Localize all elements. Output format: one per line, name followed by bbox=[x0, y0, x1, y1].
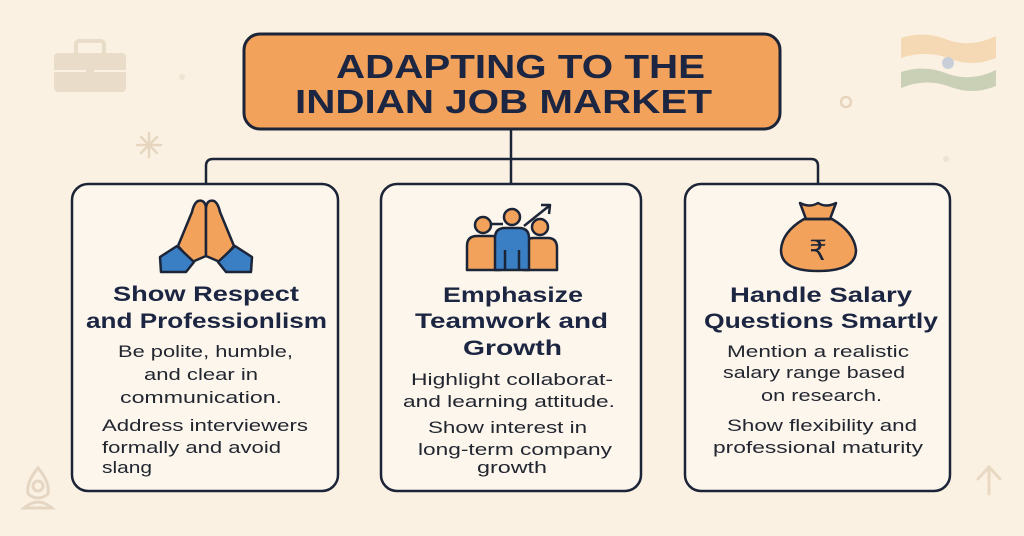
panel: salary: Show flexibility and bbox=[727, 416, 917, 435]
panel: respect: slang bbox=[102, 458, 152, 477]
panel: respect: Show Respect bbox=[113, 283, 299, 306]
panel: teamwork: Show interest in bbox=[428, 418, 587, 437]
panel: salary: Questions Smartly bbox=[704, 310, 938, 333]
icon: team with growth arrow bbox=[467, 205, 557, 270]
panel: respect: formally and avoid bbox=[102, 438, 281, 457]
panel: salary: professional maturity bbox=[713, 438, 924, 457]
panel: respect: Address interviewers bbox=[102, 416, 308, 435]
icon: lamp decoration bottom-left bbox=[24, 468, 52, 508]
panel: salary: salary range based bbox=[723, 363, 905, 382]
panel: teamwork: growth bbox=[477, 458, 547, 477]
panel: teamwork: Emphasize bbox=[443, 284, 583, 307]
panel: salary: Mention a realistic bbox=[727, 342, 910, 361]
icon: asterisk decoration bbox=[137, 133, 161, 157]
icon: flag decoration bbox=[901, 34, 996, 91]
decoration: small circle bbox=[841, 97, 851, 107]
panel: respect bbox=[72, 184, 338, 491]
panel: teamwork: and learning attitude. bbox=[403, 392, 615, 411]
panel: salary: Handle Salary bbox=[730, 284, 912, 307]
connector lines bbox=[206, 129, 818, 184]
panel: teamwork: Growth bbox=[463, 337, 562, 360]
title box bbox=[244, 34, 780, 129]
icon: briefcase decoration bbox=[54, 41, 126, 92]
icon: praying hands bbox=[160, 201, 252, 272]
title box: ADAPTING TO THE bbox=[336, 48, 705, 85]
panel: salary: on research. bbox=[761, 386, 882, 405]
panel: teamwork: long-term company bbox=[418, 440, 613, 459]
panel: respect: Be polite, humble, bbox=[118, 342, 293, 361]
icon: rupee money bag: ₹ bbox=[809, 234, 827, 267]
panel: salary bbox=[685, 184, 950, 491]
title box: INDIAN JOB MARKET bbox=[295, 83, 712, 120]
panel: teamwork: Highlight collaborat- bbox=[411, 370, 613, 389]
panel: teamwork bbox=[381, 184, 641, 491]
icon: up arrow decoration bbox=[978, 467, 1000, 494]
icon: rupee money bag bbox=[781, 203, 856, 271]
panel: respect: and clear in bbox=[144, 365, 258, 384]
panel: respect: and Professionlism bbox=[86, 310, 327, 333]
panel: respect: communication. bbox=[120, 388, 282, 407]
panel: teamwork: Teamwork and bbox=[415, 310, 608, 333]
